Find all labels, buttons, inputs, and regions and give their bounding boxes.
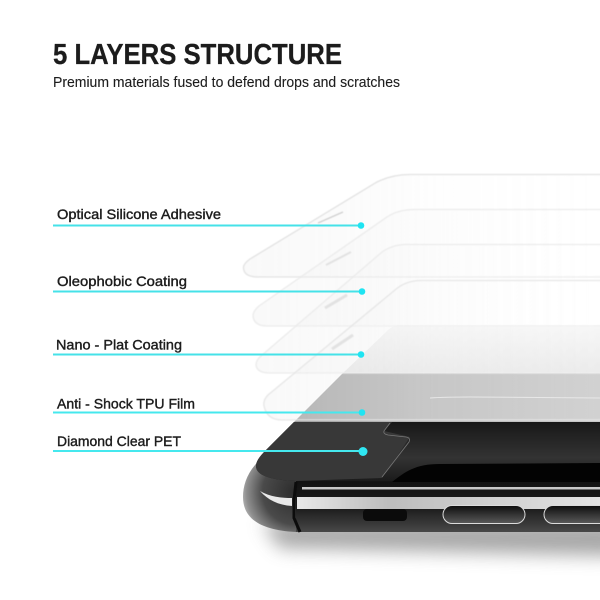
film layer 2 [253,210,600,326]
label: Oleophobic Coating: Oleophobic Coating [57,273,187,289]
film layer 3 [256,244,600,373]
subtitle: Premium materials fused to defend drops and scratches [53,74,400,91]
title: 5 LAYERS STRUCTURE [53,39,342,71]
phone upper glass seen through films [343,325,600,373]
side button one [443,506,525,524]
film layer 1 [243,174,600,277]
mid glass highlight [430,397,600,398]
label: Optical Silicone Adhesive [53,206,364,229]
label: Diamond Clear PET [53,433,368,456]
screen black reflection [392,463,600,482]
phone dark screen [256,422,600,482]
film 3 speaker slot [325,295,347,308]
screen left lighter panel [256,422,410,481]
label: Nano - Plat Coating [53,336,364,358]
film 4 speaker slot [332,335,353,349]
film 1 speaker slot [318,212,343,223]
film layer 4 [264,280,600,420]
speaker port [363,509,407,521]
label: Oleophobic Coating [53,273,365,295]
film 2 speaker slot [326,252,351,265]
label: Anti - Shock TPU Film [53,396,365,416]
phone illustration [243,325,600,556]
label: Anti - Shock TPU Film: Anti - Shock TPU Film [57,396,195,412]
phone frame body [243,458,600,532]
notch line [382,423,410,477]
phone mid glass [294,373,600,422]
phone drop shadow [262,522,600,556]
label: Optical Silicone Adhesive: Optical Silicone Adhesive [57,206,221,222]
side button two [544,506,600,524]
label: Diamond Clear PET: Diamond Clear PET [57,433,181,449]
label: Nano - Plat Coating: Nano - Plat Coating [56,336,182,352]
